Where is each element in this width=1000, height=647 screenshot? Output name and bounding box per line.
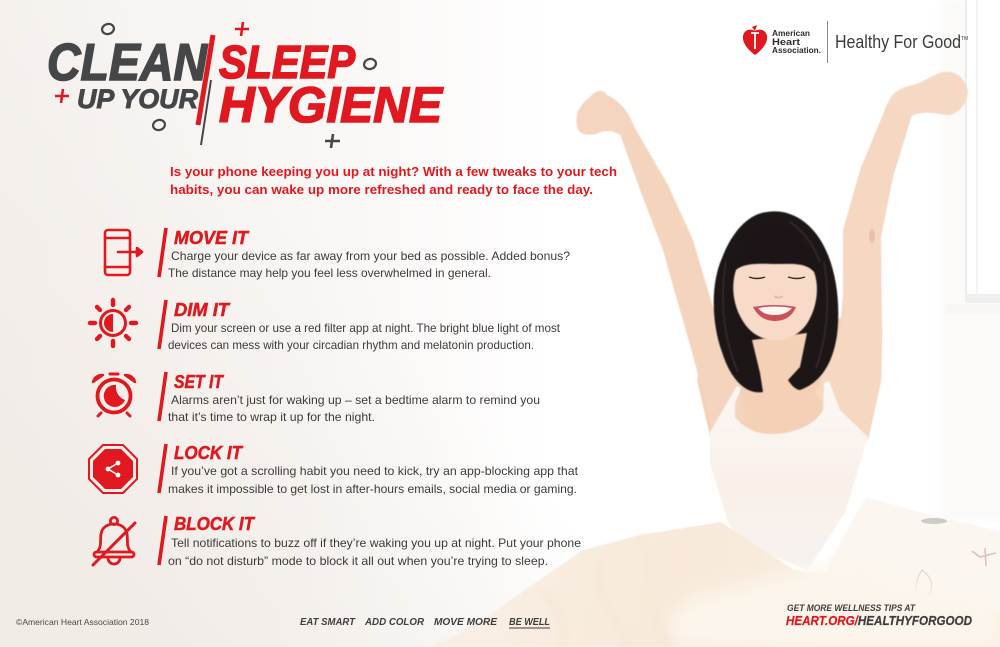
body: lock it: makes it impossible to get lost in after-hours emails, social media or gaming.	[168, 483, 577, 496]
footer navigation: EAT SMART	[300, 617, 356, 628]
body: set it: Alarms aren’t just for waking up – set a bedtime alarm to remind you	[171, 394, 540, 407]
torso skin	[697, 307, 882, 450]
intro text	[170, 165, 617, 197]
intro text: habits, you can wake up more refreshed and ready to face the day.	[170, 183, 593, 197]
body: dim it: Dim your screen or use a red filter app at night. The bright blue light of most	[171, 322, 561, 335]
decorative rings and plus signs	[55, 22, 377, 148]
body: block it: Tell notifications to buzz off if they’re waking you up at night. Put your phone	[171, 537, 581, 550]
call to action: HEART.ORG/HEALTHYFORGOOD	[786, 613, 973, 628]
title: UP YOUR	[77, 84, 198, 114]
logo wordmark: Association.	[772, 46, 821, 55]
heading: block it: BLOCK IT	[174, 514, 256, 534]
body: move it	[168, 250, 571, 280]
hair	[714, 211, 838, 392]
photo: woman stretching in bed	[430, 72, 1000, 647]
body: block it	[168, 537, 581, 568]
panel: move it	[105, 228, 571, 280]
left arm	[576, 91, 745, 436]
icon: alarm clock with moon	[93, 374, 135, 416]
icon: stop sign with share symbol	[89, 445, 137, 493]
tank top	[710, 381, 868, 570]
body: set it: that it’s time to wrap it up for the night.	[168, 411, 375, 424]
panel: block it	[93, 514, 581, 568]
pillow and bedding	[820, 497, 1000, 647]
body: set it	[168, 394, 540, 424]
body: lock it	[168, 465, 579, 496]
logo: American Heart Association, Healthy For Good	[743, 21, 968, 63]
body: move it: Charge your device as far away from your bed as possible. Added bonus?	[171, 250, 571, 263]
face	[733, 222, 817, 340]
right arm	[815, 72, 968, 437]
icon: crossed-out bell	[93, 517, 135, 565]
blanket	[430, 522, 1000, 647]
panel: dim it	[90, 300, 561, 352]
body: dim it: devices can mess with your circadian rhythm and melatonin production.	[168, 339, 534, 352]
logo wordmark	[772, 29, 821, 55]
heading: lock it: LOCK IT	[174, 443, 244, 463]
icon: phone with arrow	[105, 230, 142, 275]
icon: heart and torch	[743, 25, 767, 55]
footer navigation: MOVE MORE	[434, 617, 497, 628]
call to action	[786, 603, 973, 628]
title: sleep hygiene: SLEEP	[219, 36, 355, 88]
logo: American Heart Association, Healthy For Good: TM	[961, 36, 968, 42]
heading: dim it: DIM IT	[174, 300, 231, 320]
window	[945, 0, 1000, 314]
title dividers	[198, 35, 213, 145]
heading: set it: SET IT	[174, 372, 225, 392]
body: dim it	[168, 322, 561, 352]
body: move it: The distance may help you feel less overwhelmed in general.	[168, 267, 491, 280]
title: clean up your: CLEAN	[47, 34, 208, 92]
footer navigation: ADD COLOR	[364, 617, 425, 628]
title	[47, 22, 444, 148]
call to action: GET MORE WELLNESS TIPS AT	[787, 603, 916, 613]
intro text: Is your phone keeping you up at night? With a few tweaks to your tech	[170, 165, 617, 179]
body: lock it: If you’ve got a scrolling habit you need to kick, try an app-blocking app that	[171, 465, 579, 478]
footer navigation: BE WELL	[509, 617, 550, 628]
icon: brightness sun	[90, 300, 136, 346]
copyright: ©American Heart Association 2018	[16, 618, 149, 627]
panel: set it	[93, 372, 540, 424]
healthy for good wordmark: Healthy For Good	[835, 32, 961, 52]
panel: lock it	[89, 443, 579, 496]
title: HYGIENE	[219, 77, 444, 133]
footer navigation	[300, 617, 550, 628]
logo wordmark: American	[772, 29, 810, 38]
body: block it: on “do not disturb” mode to block it all out when you’re trying to sleep.	[168, 555, 548, 568]
heading: move it: MOVE IT	[174, 228, 250, 248]
logo wordmark: Heart	[772, 37, 800, 47]
